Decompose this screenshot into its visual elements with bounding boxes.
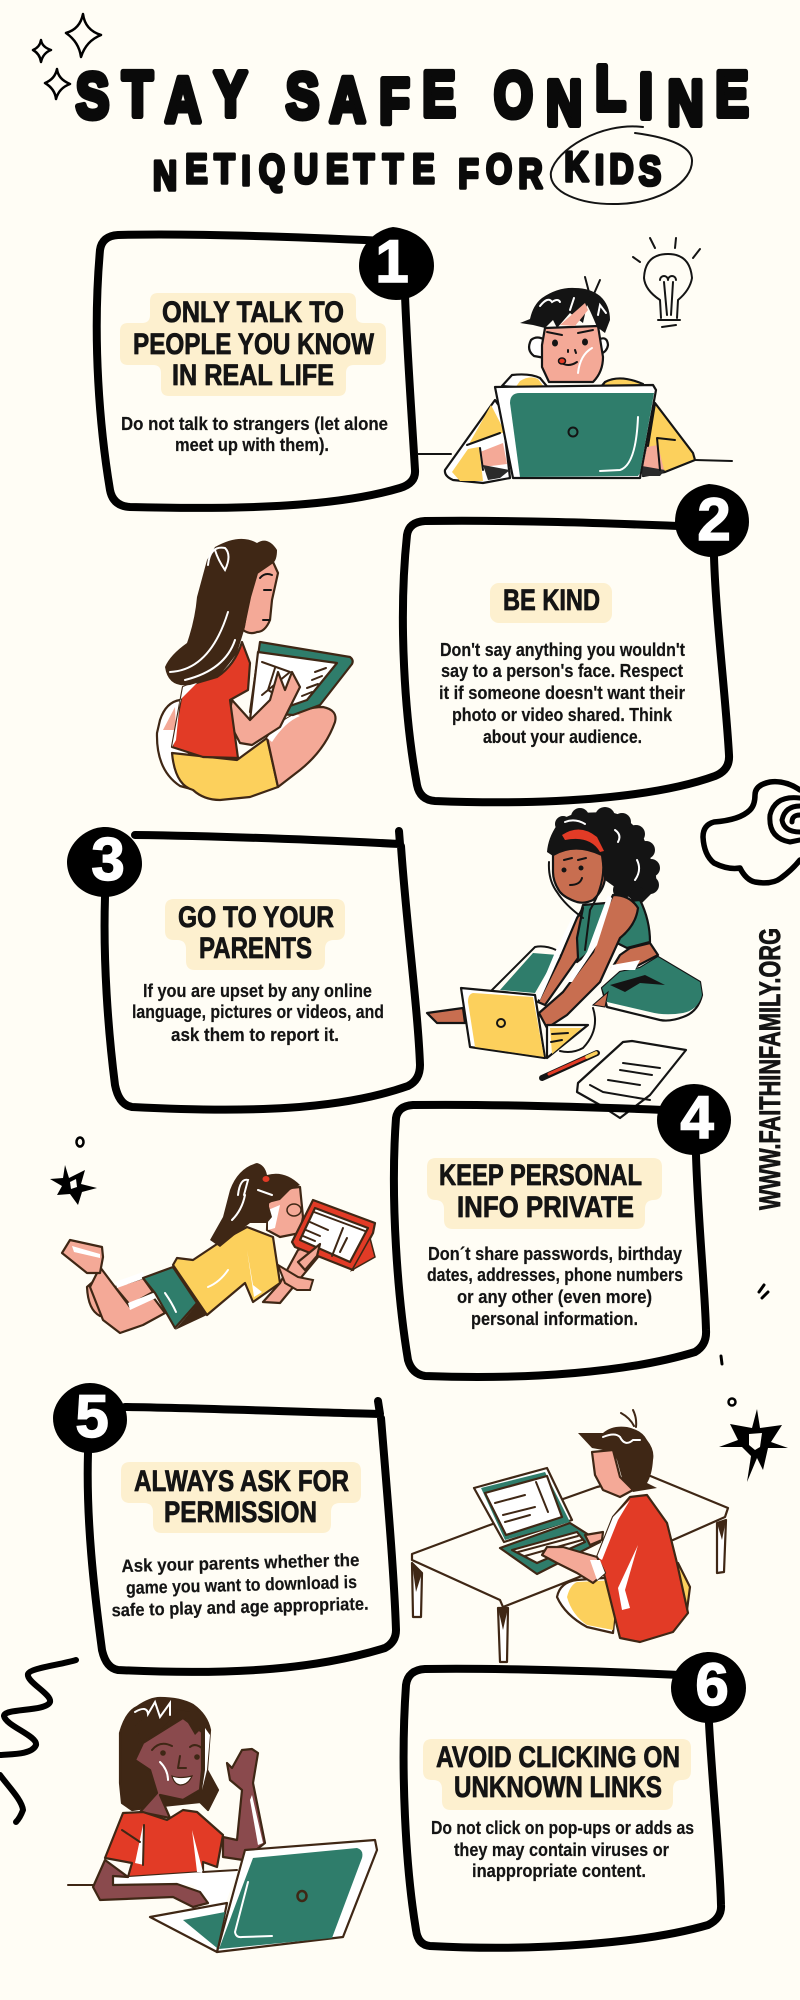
heading highlight 1 — [120, 293, 386, 396]
heading 2: BE KIND — [503, 584, 600, 617]
body 2: Don't say anything you wouldn't — [440, 640, 685, 660]
number badge 4 — [657, 1084, 731, 1155]
number badge 4: 4 — [680, 1084, 714, 1151]
subtitle: NETIQUETTE FOR KIDS — [153, 145, 661, 200]
illustration: girl lying with tablet — [62, 1163, 375, 1333]
decoration: scribble flower outline — [703, 782, 800, 883]
heading 4: INFO PRIVATE — [457, 1191, 634, 1224]
decoration: left star and dot — [50, 1138, 97, 1205]
number badge 1 — [359, 227, 434, 300]
heading 3: PARENTS — [199, 932, 312, 965]
panel 6 — [404, 1651, 746, 1948]
heading 3: GO TO YOUR — [178, 901, 334, 934]
number badge 6 — [671, 1651, 746, 1723]
body 6: inappropriate content. — [472, 1861, 646, 1881]
heading highlight 5 — [121, 1462, 361, 1533]
heading highlight 6 — [423, 1739, 691, 1810]
heading 5: ALWAYS ASK FOR — [134, 1465, 349, 1498]
sparkle stars — [33, 14, 101, 99]
oval around KIDS — [551, 126, 692, 204]
body 2: it if someone doesn't want their — [439, 683, 685, 703]
panel 3 — [67, 826, 420, 1110]
body 5: safe to play and age appropriate. — [111, 1594, 369, 1620]
body 5: Ask your parents whether the — [121, 1550, 360, 1576]
number badge 6: 6 — [695, 1651, 729, 1718]
illustration: woman with laptop and notebook — [427, 807, 702, 1118]
body 6: they may contain viruses or — [454, 1840, 669, 1860]
heading 4: KEEP PERSONAL — [439, 1159, 642, 1192]
body 2: photo or video shared. Think — [452, 705, 673, 725]
body 6: Do not click on pop-ups or adds as — [431, 1818, 694, 1838]
body 5: game you want to download is — [126, 1572, 357, 1598]
illustration: boy with laptop — [418, 238, 732, 483]
heading 1: ONLY TALK TO — [162, 296, 344, 329]
number badge 5: 5 — [75, 1383, 109, 1450]
body 4: or any other (even more) — [457, 1287, 652, 1307]
illustration: girl waving with laptop — [68, 1698, 377, 1952]
subtitle — [153, 126, 692, 204]
title: STAY SAFE ONLINE — [76, 53, 749, 139]
body 3: ask them to report it. — [171, 1025, 339, 1045]
illustration: girl with tablet — [157, 539, 353, 800]
body 1: meet up with them). — [175, 435, 329, 455]
body 3: language, pictures or videos, and — [132, 1002, 384, 1022]
body 4: personal information. — [471, 1309, 638, 1329]
number badge 5 — [53, 1383, 127, 1453]
body 4: dates, addresses, phone numbers — [427, 1265, 683, 1285]
decoration: small marks — [721, 1285, 768, 1364]
body 3: If you are upset by any online — [143, 981, 372, 1001]
body 4: Don´t share passwords, birthday — [428, 1244, 682, 1264]
number badge 1: 1 — [375, 228, 409, 295]
heading highlight 2 — [490, 583, 612, 623]
heading highlight 3 — [165, 899, 345, 970]
body 1: Do not talk to strangers (let alone — [121, 414, 388, 434]
number badge 2 — [675, 484, 749, 557]
number badge 2: 2 — [697, 486, 731, 553]
website address: WWW.FAITHINFAMILY.ORG — [754, 928, 787, 1210]
decoration: squiggle — [0, 1660, 76, 1822]
panel 4 — [394, 1084, 731, 1377]
panel 1 — [97, 227, 434, 508]
illustration: boy at table with laptop — [412, 1410, 728, 1662]
heading 5: PERMISSION — [164, 1496, 317, 1529]
heading 1: IN REAL LIFE — [172, 359, 334, 392]
panel 5 — [53, 1383, 396, 1672]
body 2: about your audience. — [483, 727, 642, 747]
heading 6: UNKNOWN LINKS — [454, 1771, 662, 1804]
body 2: say to a person's face. Respect — [441, 661, 683, 681]
heading 1: PEOPLE YOU KNOW — [133, 328, 375, 361]
heading 6: AVOID CLICKING ON — [436, 1741, 680, 1774]
decoration: right star and dot — [719, 1398, 788, 1482]
number badge 3 — [67, 826, 142, 897]
heading highlight 4 — [427, 1158, 662, 1229]
icon: light bulb — [633, 238, 700, 327]
panel 2 — [403, 484, 749, 802]
number badge 3: 3 — [91, 826, 125, 893]
